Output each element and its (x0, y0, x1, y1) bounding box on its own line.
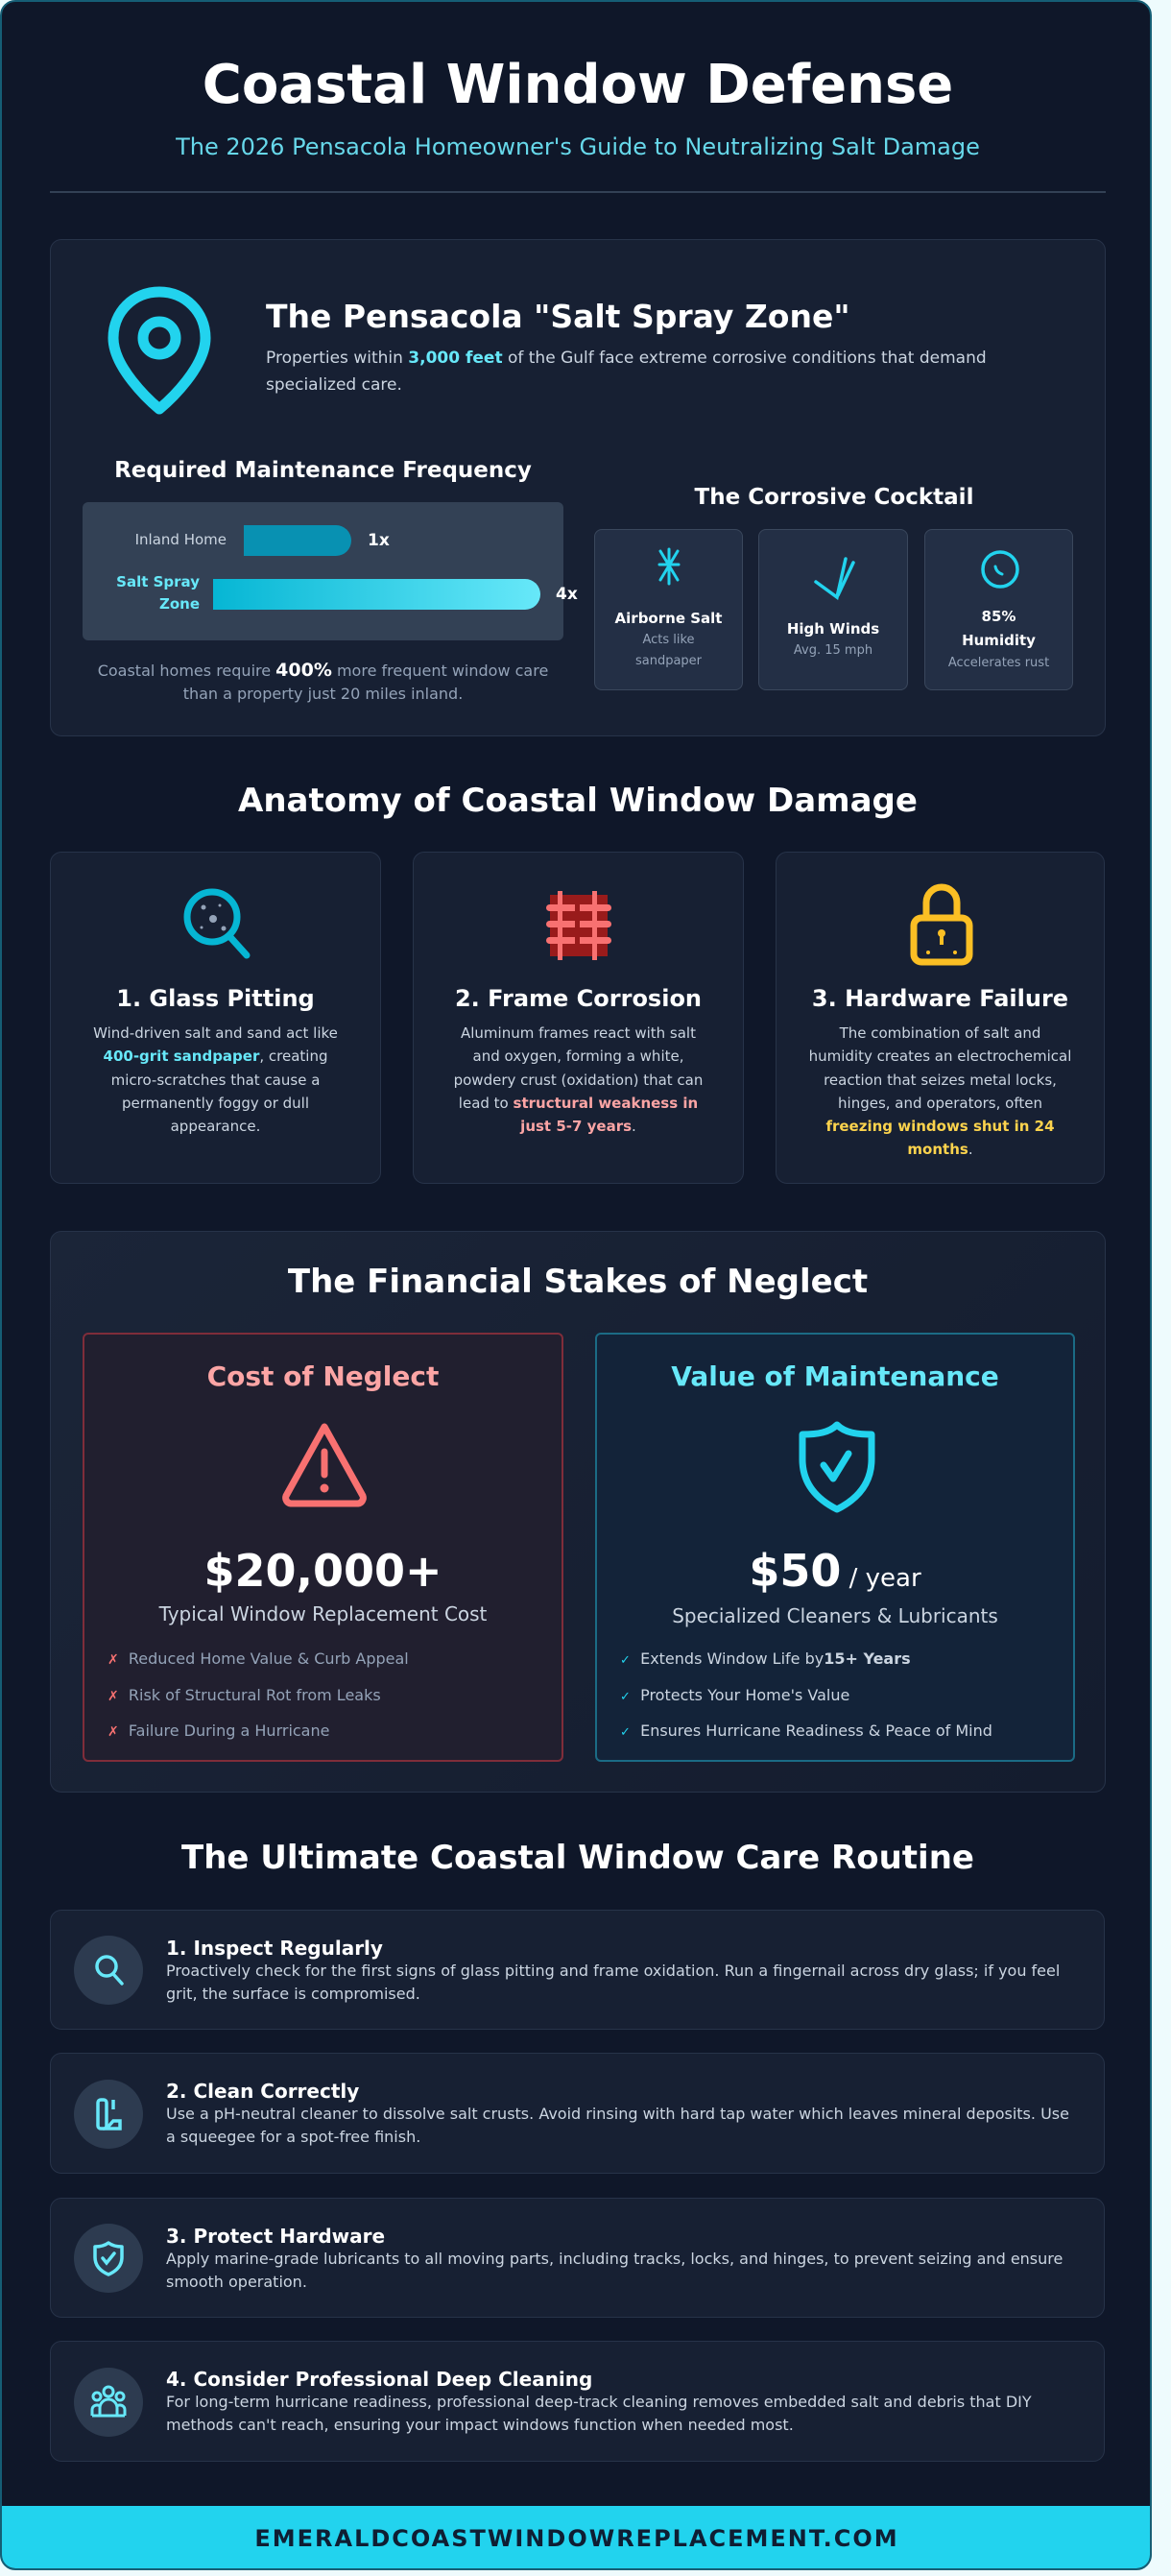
title: Coastal Window Defense (203, 54, 953, 116)
footer: EMERALDCOASTWINDOWREPLACEMENT.COM (254, 2525, 899, 2552)
icon: cleaner (74, 2080, 143, 2149)
panel: glass pitting (50, 852, 381, 1184)
icon: search (74, 1936, 143, 2005)
heading: anatomy: Anatomy of Coastal Window Damage (238, 782, 918, 820)
panel: salt spray zone: 4x (556, 585, 578, 604)
list: neglect risks: ✗ Reduced Home Value & Curb Appeal (108, 1649, 409, 1668)
list: neglect risks (108, 1649, 409, 1740)
panel: step 4: For long-term hurricane readiness, professional deep-track cleaning removes embedded salt and debris that DIY methods can't reach, ensuring your impact windows function when needed most. (166, 2393, 1032, 2434)
panel: step 2: Use a pH-neutral cleaner to dissolve salt crusts. Avoid rinsing with hard tap water which leaves mineral deposits. Use (166, 2105, 1069, 2123)
icon: salt (658, 547, 680, 586)
icon: location pin (108, 286, 211, 415)
icon: wind (814, 557, 855, 600)
icon: padlock (910, 883, 973, 966)
panel: hardware failure (776, 852, 1105, 1184)
card: high winds (758, 529, 908, 690)
panel: step 1 (50, 1910, 1105, 2030)
panel: step 2: a squeegee for a spot-free finish. (166, 2128, 420, 2146)
heading: maintenance frequency: Required Maintenance Frequency (114, 458, 532, 483)
card: cost of neglect: $20,000+ (203, 1545, 442, 1597)
card: cost of neglect (83, 1333, 563, 1762)
card: value of maintenance: Value of Maintenance (671, 1360, 999, 1392)
panel: step 2 (50, 2053, 1105, 2174)
panel: frame corrosion (413, 852, 744, 1184)
list: maintenance benefits: ✓ Protects Your Home's Value (620, 1686, 849, 1703)
card: airborne salt: Acts like (642, 633, 695, 647)
panel: financial stakes (50, 1231, 1106, 1793)
panel: step 2: 2. Clean Correctly (166, 2080, 359, 2103)
card title: 1. Glass Pitting (116, 985, 315, 1012)
card: value of maintenance: Specialized Cleaners & Lubricants (672, 1604, 998, 1627)
card: airborne salt (594, 529, 743, 690)
card: humidity: Accelerates rust (948, 656, 1049, 670)
panel: step 1: 1. Inspect Regularly (166, 1937, 383, 1960)
bar chart: Inland Home (135, 531, 227, 548)
card title: 3. Hardware Failure (812, 985, 1068, 1012)
list: neglect risks: ✗ Failure During a Hurricane (108, 1721, 329, 1740)
card text: reaction that seizes metal locks, (824, 1071, 1057, 1089)
subtitle: The 2026 Pensacola Homeowner's Guide to Neutralizing Salt Damage (176, 133, 980, 160)
icon: team (74, 2368, 143, 2437)
card: humidity (924, 529, 1073, 690)
heading: The Financial Stakes of Neglect (288, 1263, 868, 1301)
icon: magnifier (184, 889, 250, 958)
card: humidity: 85% (982, 608, 1016, 625)
bar chart: 1x (368, 531, 390, 550)
card text: Aluminum frames react with salt and oxygen, forming a white, powdery crust (oxidation) that can lead to structural weakness in just 5-7 years. (454, 1024, 703, 1135)
card: airborne salt: Airborne Salt (615, 610, 722, 627)
panel: step 1: Proactively check for the first signs of glass pitting and frame oxidation. Run a fingernail across dry glass; if you feel grit, the surface is compromised. (166, 1962, 1060, 2003)
card text: months. (907, 1141, 973, 1158)
icon: corroded frame (546, 891, 611, 960)
card text (809, 1024, 1071, 1158)
card title: 2. Frame Corrosion (455, 985, 702, 1012)
card: humidity: Humidity (962, 632, 1036, 649)
icon: shield check (799, 1421, 875, 1513)
card: high winds: High Winds (787, 620, 879, 638)
footer (2, 2506, 1152, 2572)
card: airborne salt: sandpaper (635, 654, 702, 668)
icon: humidity gauge (981, 550, 1019, 589)
card text: The combination of salt and (840, 1024, 1040, 1042)
card text: Wind-driven salt and sand act like 400-grit sandpaper, creating micro-scratches that cause a permanently foggy or dull appearance. (93, 1024, 338, 1135)
icon: shield (74, 2224, 143, 2293)
card: value of maintenance (595, 1333, 1075, 1762)
list: maintenance benefits: ✓ Ensures Hurricane Readiness & Peace of Mind (620, 1721, 992, 1740)
list: maintenance benefits (620, 1649, 992, 1740)
panel: step 3 (50, 2198, 1105, 2318)
heading: care routine: The Ultimate Coastal Window Care Routine (181, 1839, 974, 1877)
card text: humidity creates an electrochemical (809, 1047, 1071, 1065)
card: value of maintenance: $50 / year (749, 1545, 921, 1597)
bar chart (83, 502, 563, 640)
bar chart: Zone (159, 595, 200, 613)
icon: warning (282, 1423, 367, 1507)
card text: hinges, and operators, often (838, 1095, 1042, 1112)
bar chart: Salt Spray (116, 573, 200, 590)
text block: Properties within 3,000 feet of the Gulf face extreme corrosive conditions that demand specialized care. (266, 349, 987, 395)
heading: corrosive cocktail: The Corrosive Cocktail (695, 485, 973, 510)
heading: The Pensacola "Salt Spray Zone" (266, 298, 850, 335)
panel: step 4: 4. Consider Professional Deep Cleaning (166, 2368, 592, 2391)
panel: step 3: 3. Protect Hardware (166, 2225, 385, 2248)
list: maintenance benefits: ✓ Extends Window Life by15+ Years (620, 1649, 911, 1668)
panel: step 4 (50, 2341, 1105, 2462)
card text: freezing windows shut in 24 (825, 1118, 1055, 1135)
panel: step 3: Apply marine-grade lubricants to all moving parts, including tracks, locks, and hinges, to prevent seizing and ensure smooth operation. (166, 2250, 1063, 2291)
footnote: Coastal homes require 400% more frequent window care than a property just 20 miles inland. (98, 660, 548, 703)
panel: salt spray zone (50, 239, 1106, 736)
list: neglect risks: ✗ Risk of Structural Rot from Leaks (108, 1686, 381, 1703)
card: high winds: Avg. 15 mph (794, 643, 872, 658)
card: cost of neglect: Typical Window Replacement Cost (159, 1602, 487, 1625)
card: cost of neglect: Cost of Neglect (207, 1360, 439, 1392)
